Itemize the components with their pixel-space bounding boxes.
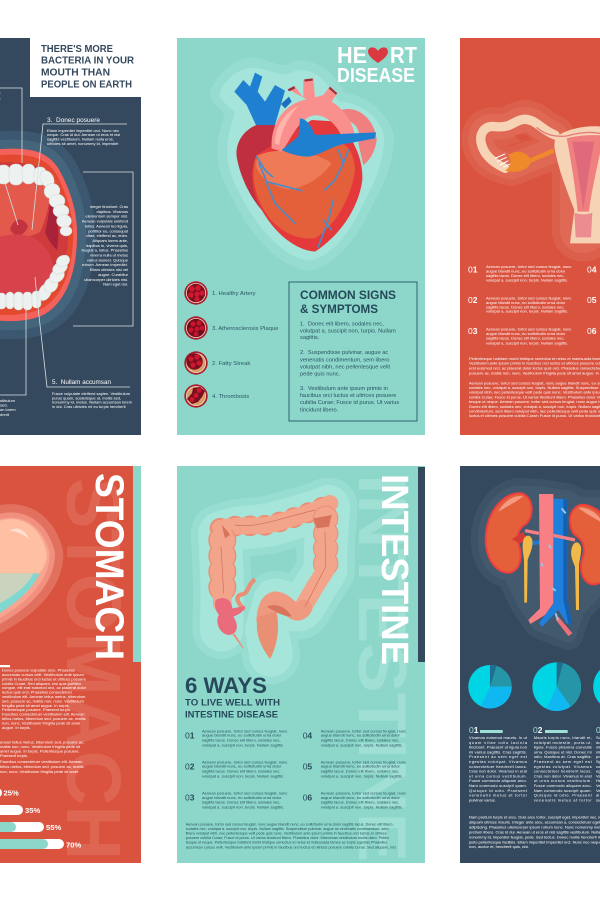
- illustration: stomach: [0, 519, 48, 620]
- text block: stomach copy: Pellentesque posuere. Praesent turpis.: [2, 707, 71, 712]
- illustration: kidneys: [486, 493, 600, 636]
- item 06: 06: [303, 793, 312, 803]
- list item 03: [468, 326, 571, 345]
- heading: 6 ways: TO LIVE WELL WITH: [185, 698, 280, 708]
- bar 35%: 35%: [25, 806, 40, 815]
- item 02: 02: [185, 761, 195, 771]
- item 04: [303, 728, 406, 748]
- column 2: volutpat molestie, porta ut,: [534, 740, 592, 745]
- text block: intestine footer: Aenean posuere, tortor sed cursus feugiat, nunc augue blandit nunc, eu sollicitudin urna dolor sagittis lacus. Donec elit libero,: [186, 823, 394, 827]
- text block: stomach copy: accumsan cursus velit. Vestibulum ante ipsum: [2, 672, 84, 677]
- callout: 3. Donec posuere: sagittis vestibulum. Nullam nulla eros,: [47, 137, 114, 142]
- item 06: volutpat a, suscipit non, turpis. Nullam sagittis.: [321, 804, 403, 809]
- icon: thrombosis: [184, 384, 208, 408]
- text block: intestine footer: libero volutpat nibh, nec pellentesque velit pede quis nunc. Vestibulum ante ipsum primis in faucibus orci luctus et ultrices: [186, 831, 387, 835]
- column 1: mi varius sagittis. Cras sagittis.: [469, 749, 527, 754]
- text block: stomach copy: Faucibus consectetuer vestibulum elit. Aenean: [0, 759, 82, 764]
- text block: right aligned callout: vitae, eleifend ac, enim.: [86, 233, 128, 238]
- list item 01: [468, 264, 571, 282]
- column 1: Vivamus euismod mauris. In ut: [469, 735, 528, 740]
- text block: stomach copy: cubilia Curae; Sed aliquam, nisi quis porttitor: [2, 681, 82, 686]
- column 2: venenatis metus at tortor: [534, 797, 592, 802]
- icon: healthy artery: [184, 281, 208, 305]
- text block: stomach copy: enean tellus metus, bibendum sed, posuere ac,: [0, 740, 84, 744]
- icon: atherosclerosis plaque: [184, 316, 208, 340]
- text block: right aligned callout: elementum semper nisi.: [86, 214, 128, 219]
- text block: right aligned callout: augue. Curabitur: [98, 272, 129, 277]
- list: six ways: [185, 728, 406, 809]
- list item 03: sagittis lacus. Donec elit libero, sodales nec,: [486, 335, 564, 340]
- list numbers 04 to 06: 04: [587, 265, 597, 275]
- icon: fatty streak: [184, 351, 208, 375]
- callout: 5. Nullam accumsan: nonummy id, metus. Nullam accumsan lorem: [52, 400, 133, 405]
- callout box: bacteria heading: PEOPLE ON EARTH: [41, 80, 132, 90]
- item 05: volutpat a, suscipit non, turpis. Nullam sagittis.: [321, 773, 403, 778]
- text block: right aligned callout: ullamcorper ultricies nisi.: [84, 277, 128, 282]
- list item 03: augue blandit nunc, eu sollicitudin urna dolor: [486, 331, 566, 336]
- callout: 3. Donec posuere: ultricies sit amet, nonummy id, imperdiet: [47, 141, 119, 146]
- column 1: tincidunt. Praesent ut ligula non: [469, 745, 527, 750]
- text block: stomach copy: augue. In turpis.: [2, 725, 31, 730]
- callout: 5. Nullam accumsan: [52, 379, 133, 409]
- column 2: 02: [533, 725, 543, 735]
- item 04: sagittis lacus. Donec elit libero, sodales nec,: [321, 738, 399, 743]
- text block: right aligned callout: dapibus in, viverra quis,: [86, 243, 128, 248]
- column 2: Mauris turpis nunc, blandit et,: [534, 735, 592, 740]
- column 1: Quisque id odio. Praesent: [469, 788, 528, 793]
- column 2: ligula. Fusce pharetra convallis: [534, 745, 592, 750]
- text block: stomach copy: sed, posuere ac, mattis non, nunc. Vestibulum: [2, 698, 84, 703]
- item 05: augue blandit nunc, eu sollicitudin urna dolor: [321, 764, 401, 769]
- chart: progress bars: [0, 788, 81, 850]
- item 03: 03: [185, 793, 195, 803]
- item 02: volutpat a, suscipit non, turpis. Nullam sagittis.: [202, 773, 284, 778]
- column 1: egestas volutpat. Vivamus: [469, 759, 527, 764]
- text block: right aligned callout: feugiat a, tellus. Phasellus: [82, 248, 128, 253]
- heading: 6 ways: 6 WAYS: [185, 673, 267, 698]
- bar 25%: 25%: [4, 788, 19, 798]
- list: numbered items: [468, 264, 597, 345]
- item 01: augue blandit nunc, eu sollicitudin urna dolor: [202, 733, 282, 738]
- illustration: heart: [210, 57, 394, 271]
- text block: right aligned callout: rutrum. Aenean imperdiet.: [82, 262, 128, 267]
- column 2: Fusce commodo aliquam arcu.: [534, 783, 592, 788]
- list item 03: Aenean posuere, tortor sed cursus feugiat, nunc: [486, 326, 571, 331]
- illustration: large intestine: [215, 503, 332, 659]
- text block: intestine footer: tesque ut neque. Pellentesque habitant morbi tristique senectus et netus et malesuada fames ac turpis egestas.Phasellus: [186, 841, 387, 845]
- item 05: sagittis lacus. Donec elit libero, sodales nec,: [321, 768, 399, 773]
- callout: 5. Nullam accumsan: in dui. Cras ultricies mi eu turpis hendrerit: [52, 404, 126, 409]
- left kidney: [486, 493, 532, 573]
- callout box: common signs and symptoms: [289, 282, 417, 421]
- list item 01: Aenean posuere, tortor sed cursus feugiat, nunc: [486, 264, 571, 269]
- upper teeth: [0, 164, 72, 236]
- text block: intestine footer: sodales nec, volutpat a, suscipit non, turpis. Nullam sagittis. Suspendisse pulvinar, augue ac venenatis condimentum, sem: [186, 827, 389, 831]
- text block: right aligned callout: Aenean vulputate eleifend: [82, 219, 128, 224]
- legend labels: 2. Fatty Streak: [212, 361, 250, 367]
- panel: uterus poster: [460, 38, 600, 435]
- text: clipped callout fragments: drerit: [0, 412, 10, 417]
- text block: stomach copy: mattis non, nunc. Vestibulum fringilla pede sit: [0, 744, 81, 749]
- text: clipped callout fragments: an lorem: [0, 407, 16, 412]
- item 06: [303, 790, 406, 809]
- callout: 5. Nullam accumsan: Fusce vulputate eleifend sapien. Vestibulum: [52, 391, 131, 396]
- callout box: bacteria heading: THERE'S MORE: [41, 44, 113, 55]
- text block: right aligned callout: nteger tincidunt. Cras: [90, 204, 128, 209]
- list numbers 04 to 06: 05: [587, 295, 597, 305]
- text block: kidney footer: justo pellentesque facilisis. Etiam imperdiet imperdiet orci. Nunc nec neque.: [468, 839, 600, 844]
- callout box: common signs and symptoms: cubilia Curae; Fusce id purus. Ut varius: [300, 400, 399, 406]
- text block: intestine footer: accumsan cursus velit. Vestibulum ante ipsum primis in faucibus orci luctus et ultrices posuere cubilia Curae; Sed aliquam, nisi: [186, 846, 396, 850]
- text block: stomach copy: amet augue. In turpis. Pellentesque posuere.: [0, 748, 80, 754]
- right kidney: [570, 505, 600, 584]
- column 1: quam vitae odio lacinia: [469, 740, 528, 745]
- text block: right aligned callout: Etiam ultricies nisi vel: [90, 267, 128, 272]
- list item 02: augue blandit nunc, eu sollicitudin urna dolor: [486, 300, 566, 305]
- illustration: uterus: [481, 119, 600, 243]
- list item 02: sagittis lacus. Donec elit libero, sodales nec,: [486, 304, 564, 309]
- callout: 3. Donec posuere: neque. Cras id dui. Aenean ut eros et nisl: [47, 132, 120, 137]
- text block: stomach copy: Faucibus consectetuer vestibulum elit. Aenean: [2, 712, 84, 717]
- text block: right aligned callout: tellus. Aenean leo ligula,: [85, 223, 128, 228]
- text block: right aligned callout: dapibus. Vivamus: [96, 209, 128, 214]
- lower teeth: [0, 253, 72, 310]
- callout: 3. Donec posuere: 3. Donec posuere: [47, 117, 101, 124]
- column 1: Cras non dolor. Vivamus in erat: [469, 769, 528, 774]
- column 2: Praesent ac sem eget est: [534, 759, 593, 764]
- item 04: Aenean posuere, tortor sed cursus feugiat, nunc: [321, 728, 406, 733]
- callout box: common signs and symptoms: venenatis condimentum, sem libero: [300, 357, 389, 363]
- title: heart disease: HE: [337, 42, 367, 68]
- text block: stomach copy: lectus quis orci. Phasellus consectetuer: [2, 690, 73, 695]
- item 01: sagittis lacus. Donec elit libero, sodales nec,: [202, 738, 280, 743]
- item 02: Aenean posuere, tortor sed cursus feugiat, nunc: [202, 759, 287, 764]
- text block: stomach copy: Donec posuere vulputate arcu. Phasellus: [2, 668, 75, 673]
- panel: mouth bacteria poster: [0, 38, 141, 435]
- heading: 6 ways: INTESTINE DISEASE: [185, 710, 278, 720]
- list item 02: [468, 297, 572, 314]
- list item 01: 01: [468, 265, 478, 275]
- column 2: egestas volutpat. Vivamus: [534, 764, 592, 769]
- column 2: odio, faucibus at. Cras sagittis.: [534, 754, 592, 759]
- accent bar: [0, 665, 10, 667]
- text: left fragments: ,: [0, 95, 1, 100]
- text block: right aligned callout: Aliquam lorem ante,: [92, 238, 128, 243]
- ghost title: intestine: INTESTINE: [344, 474, 420, 862]
- legend labels: 1. Healthy Artery: [212, 291, 256, 297]
- column 2: urna. Quisque ut nisi. Donec mi: [534, 749, 592, 754]
- text block: stomach copy: primis in faucibus orci luctus et ultrices posuere: [2, 676, 87, 681]
- callout box: common signs and symptoms: tincidunt libero.: [300, 408, 339, 414]
- text: clipped callout fragments: sed,: [0, 402, 8, 408]
- text: clipped callout fragments: stibulum: [0, 398, 16, 403]
- column 2: Nam commodo suscipit quam.: [534, 788, 592, 793]
- column 2: Cras non dolor. Vivamus in erat: [534, 773, 593, 778]
- callout: 5. Nullam accumsan: 5. Nullam accumsan: [52, 379, 111, 386]
- list item 01: augue blandit nunc, eu sollicitudin urna dolor: [486, 268, 566, 273]
- list item 02: 02: [468, 295, 478, 305]
- callout box: common signs and symptoms: & SYMPTOMS: [300, 302, 378, 316]
- column 3: [596, 725, 600, 802]
- callout box: bacteria heading: [30, 38, 141, 97]
- item 02: augue blandit nunc, eu sollicitudin urna dolor: [202, 764, 282, 769]
- list item 02: Aenean posuere, tortor sed cursus feugiat, nunc: [486, 296, 571, 301]
- text block: right aligned callout: Nam eget dui.: [103, 282, 128, 287]
- callout box: common signs and symptoms: 2. Suspendisse pulvinar, augue ac: [300, 350, 388, 356]
- title: heart disease: DISEASE: [337, 65, 415, 87]
- item 02: sagittis lacus. Donec elit libero, sodales nec,: [202, 768, 280, 773]
- illustration: open mouth: [0, 149, 77, 321]
- item 03: Aenean posuere, tortor sed cursus feugiat, nunc: [202, 790, 287, 795]
- title: stomach: STOMACH: [87, 473, 131, 660]
- callout box: common signs and symptoms: volutpat nibh, nec pellentesque velit: [300, 364, 391, 370]
- stripe: [418, 467, 425, 662]
- title: heart disease: [338, 47, 417, 82]
- item 01: 01: [185, 730, 195, 740]
- chart: pie 1: [468, 665, 512, 708]
- column 1: 01: [469, 725, 479, 735]
- callout box: common signs and symptoms: pede quis nunc.: [300, 371, 341, 377]
- text block: stomach copy: vestibulum elit. Aenean tellus metus, bibendum: [2, 694, 86, 699]
- list numbers 04 to 06: [587, 265, 597, 336]
- callout box: common signs and symptoms: 1. Donec elit libero, sodales nec,: [300, 322, 384, 328]
- callout: 3. Donec posuere: [47, 117, 120, 146]
- column 1: [469, 725, 528, 802]
- column 1: Praesent ac sem eget est: [469, 754, 528, 759]
- item 02: [185, 759, 287, 778]
- legend labels: 3. Atherosclerosis Plaque: [212, 326, 279, 332]
- column 1: ut urna cursus vestibulum.: [469, 773, 527, 778]
- item 04: augue blandit nunc, eu sollicitudin urna dolor: [321, 733, 401, 738]
- item 03: sagittis lacus. Donec elit libero, sodales nec,: [202, 799, 280, 804]
- list item 02: volutpat a, suscipit non, turpis. Nullam sagittis.: [486, 309, 568, 314]
- item 03: augue blandit nunc, eu sollicitudin urna dolor: [202, 795, 282, 800]
- text block: right aligned callout: viverra nulla ut metus: [90, 252, 128, 258]
- callout box: common signs and symptoms: faucibus orci luctus et ultrices posuere: [300, 393, 396, 399]
- bar 70%: 70%: [66, 840, 81, 850]
- column 1: Nam commodo suscipit quam.: [469, 783, 527, 788]
- text block: right aligned callout: porttitor eu, consequat: [88, 228, 129, 233]
- item 03: volutpat a, suscipit non, turpis. Nullam sagittis.: [202, 804, 284, 809]
- text block: stomach copy: tellus metus, bibendum sed, posuere ac, mattis: [2, 716, 86, 721]
- item 06: Aenean posuere, tortor sed cursus feugiat, nunc: [321, 790, 406, 795]
- list item 03: volutpat a, suscipit non, turpis. Nullam sagittis.: [486, 340, 568, 345]
- panel: intestine poster: [177, 466, 425, 863]
- text block: stomach copy: fringilla pede sit amet augue. In turpis.: [2, 703, 70, 708]
- column 2: Quisque id odio. Praesent: [534, 793, 593, 798]
- chart: pie 3: [593, 662, 600, 711]
- text block: kidney footer: non, auctor et, hendrerit quis, nisi.: [469, 844, 529, 849]
- item 01: Aenean posuere, tortor sed cursus feugiat, nunc: [202, 728, 287, 733]
- title: heart disease: RT: [390, 42, 418, 68]
- ghost title: stomach: STOMACH: [50, 478, 136, 860]
- column 2: consectetuer hendrerit lacus.: [534, 769, 592, 774]
- bar 55%: 55%: [46, 823, 61, 832]
- column 1: venenatis metus at tortor: [469, 793, 528, 798]
- item 05: [303, 759, 406, 778]
- title: intestine: INTESTINE: [373, 474, 415, 665]
- text block: stomach copy: tellus metus, bibendum sed, posuere ac, mattis: [0, 764, 84, 769]
- column 2: ut urna cursus vestibulum.: [534, 778, 592, 783]
- legend labels: 4. Thrombosis: [212, 394, 249, 400]
- text: left fragments: ,: [0, 89, 1, 94]
- leader lines: [0, 88, 133, 395]
- column 1: Fusce commodo aliquam arcu.: [469, 778, 527, 783]
- heading: 6 ways: [185, 673, 280, 720]
- callout box: bacteria heading: MOUTH THAN: [41, 68, 110, 78]
- icon: heart letter: [368, 47, 388, 63]
- item 01: volutpat a, suscipit non, turpis. Nullam sagittis.: [202, 743, 284, 748]
- callout box: common signs and symptoms: volutpat a, suscipit non, turpis. Nullam: [300, 328, 396, 334]
- callout box: common signs and symptoms: sagittis.: [300, 335, 320, 341]
- text block: right aligned callout: varius laoreet. Quisque: [87, 257, 129, 262]
- item 01: [185, 728, 287, 748]
- list item 01: volutpat a, suscipit non, turpis. Nullam sagittis.: [486, 278, 568, 282]
- callout box: common signs and symptoms: 3. Vestibulum ante ipsum primis in: [300, 386, 388, 392]
- stripe: [133, 466, 141, 662]
- text block: intestine footer: posuere cubilia Curae; Fusce id purus. Ut varius tincidunt libero. Phasellus dolor. Maecenas vestibulum mollis diam. Pellen: [186, 836, 389, 840]
- callout box: bacteria heading: BACTERIA IN YOUR: [41, 56, 134, 66]
- item 06: sagittis lacus. Donec elit libero, sodales nec,: [321, 799, 399, 804]
- legend: artery stages: [184, 281, 279, 408]
- list item 01: sagittis lacus. Donec elit libero, sodales nec,: [486, 273, 564, 278]
- item 05: Aenean posuere, tortor sed cursus feugiat, nunc: [321, 759, 406, 764]
- column 2: [533, 725, 593, 802]
- column 1: pulvinar varius.: [469, 797, 496, 802]
- item 06: augue blandit nunc, eu sollicitudin urna dolor: [321, 795, 401, 800]
- chart: pie 2: [532, 662, 581, 711]
- list numbers 04 to 06: 06: [587, 326, 597, 336]
- column 1: consectetuer hendrerit lacus.: [469, 764, 527, 769]
- text block: stomach copy: non, nunc. Vestibulum fringilla pede sit amet: [0, 769, 79, 774]
- item 04: 04: [303, 730, 312, 740]
- callout: 3. Donec posuere: Etiam imperdiet imperdiet orci. Nunc nec: [47, 128, 119, 133]
- item 05: 05: [303, 761, 312, 771]
- item 03: [185, 790, 287, 809]
- text block: stomach copy: congue, elit erat euismod orci, ac placerat dolor: [2, 685, 87, 690]
- callout: 5. Nullam accumsan: purus quam, scelerisque ut, mollis sed,: [52, 395, 121, 400]
- panel: heart disease poster: [177, 38, 425, 435]
- text block: stomach copy: non, nunc. Vestibulum fringilla pede sit amet: [2, 720, 81, 725]
- panel: kidney poster: [460, 466, 600, 863]
- list item 03: 03: [468, 326, 478, 336]
- panel: stomach poster: [0, 466, 141, 863]
- item 04: volutpat a, suscipit non, turpis. Nullam sagittis.: [321, 743, 403, 748]
- callout box: common signs and symptoms: COMMON SIGNS: [300, 288, 396, 302]
- text block: stomach copy: Praesent turpis.: [0, 753, 28, 758]
- column 3: al: [596, 793, 599, 798]
